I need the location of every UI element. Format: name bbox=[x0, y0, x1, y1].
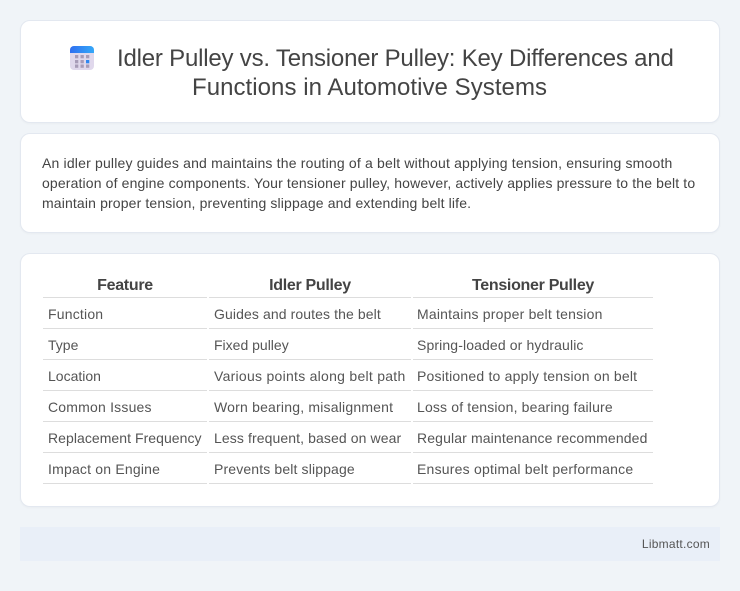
row: Impact on Engine: Prevents belt slippage bbox=[214, 461, 355, 477]
row: Function: Function bbox=[48, 306, 103, 322]
title: Idler Pulley vs. Tensioner Pulley: Key Differences and bbox=[117, 45, 674, 72]
panel: header bbox=[20, 20, 720, 123]
table header: Feature bbox=[97, 277, 153, 294]
row: Impact on Engine bbox=[48, 461, 633, 477]
row: Function: Guides and routes the belt bbox=[214, 306, 381, 322]
row: Replacement Frequency bbox=[48, 430, 648, 446]
row: Location: Location bbox=[48, 368, 101, 384]
row: Location: Various points along belt path bbox=[214, 368, 406, 384]
table header: Tensioner Pulley bbox=[472, 277, 594, 294]
footer bbox=[20, 527, 720, 561]
row: Common Issues: Common Issues bbox=[48, 399, 152, 415]
row: Type: Type bbox=[48, 337, 78, 353]
row: Replacement Frequency: Regular maintenance recommended bbox=[417, 430, 648, 446]
title bbox=[117, 45, 674, 101]
row: Replacement Frequency: Replacement Frequency bbox=[48, 430, 202, 446]
panel: description bbox=[20, 133, 720, 233]
row: Replacement Frequency: Less frequent, based on wear bbox=[214, 430, 401, 446]
footer text: Libmatt.com bbox=[642, 537, 710, 551]
row: Type bbox=[48, 337, 584, 353]
row: Common Issues: Worn bearing, misalignment bbox=[214, 399, 393, 415]
text block: description bbox=[42, 155, 695, 211]
text block: description: An idler pulley guides and maintains the routing of a belt without applying tension, ensuring smooth bbox=[42, 155, 672, 171]
row: Location: Positioned to apply tension on belt bbox=[417, 368, 637, 384]
row: Common Issues: Loss of tension, bearing failure bbox=[417, 399, 613, 415]
row: Type: Spring-loaded or hydraulic bbox=[417, 337, 584, 353]
panel: comparison table bbox=[20, 253, 720, 507]
text block: description: maintain proper tension, preventing slippage and extending belt life. bbox=[42, 195, 471, 211]
row: Common Issues bbox=[48, 399, 613, 415]
table header bbox=[97, 277, 594, 294]
table header: Idler Pulley bbox=[269, 277, 351, 294]
title: Functions in Automotive Systems bbox=[192, 74, 547, 101]
icon: calendar bbox=[70, 46, 94, 70]
row: Impact on Engine: Ensures optimal belt performance bbox=[417, 461, 633, 477]
row: Function: Maintains proper belt tension bbox=[417, 306, 603, 322]
row: Function bbox=[48, 306, 603, 322]
row: Type: Fixed pulley bbox=[214, 337, 289, 353]
text block: description: operation of engine components. Your tensioner pulley, however, actively applies pressure to the belt to bbox=[42, 175, 695, 191]
row: Impact on Engine: Impact on Engine bbox=[48, 461, 160, 477]
row: Location bbox=[48, 368, 637, 384]
